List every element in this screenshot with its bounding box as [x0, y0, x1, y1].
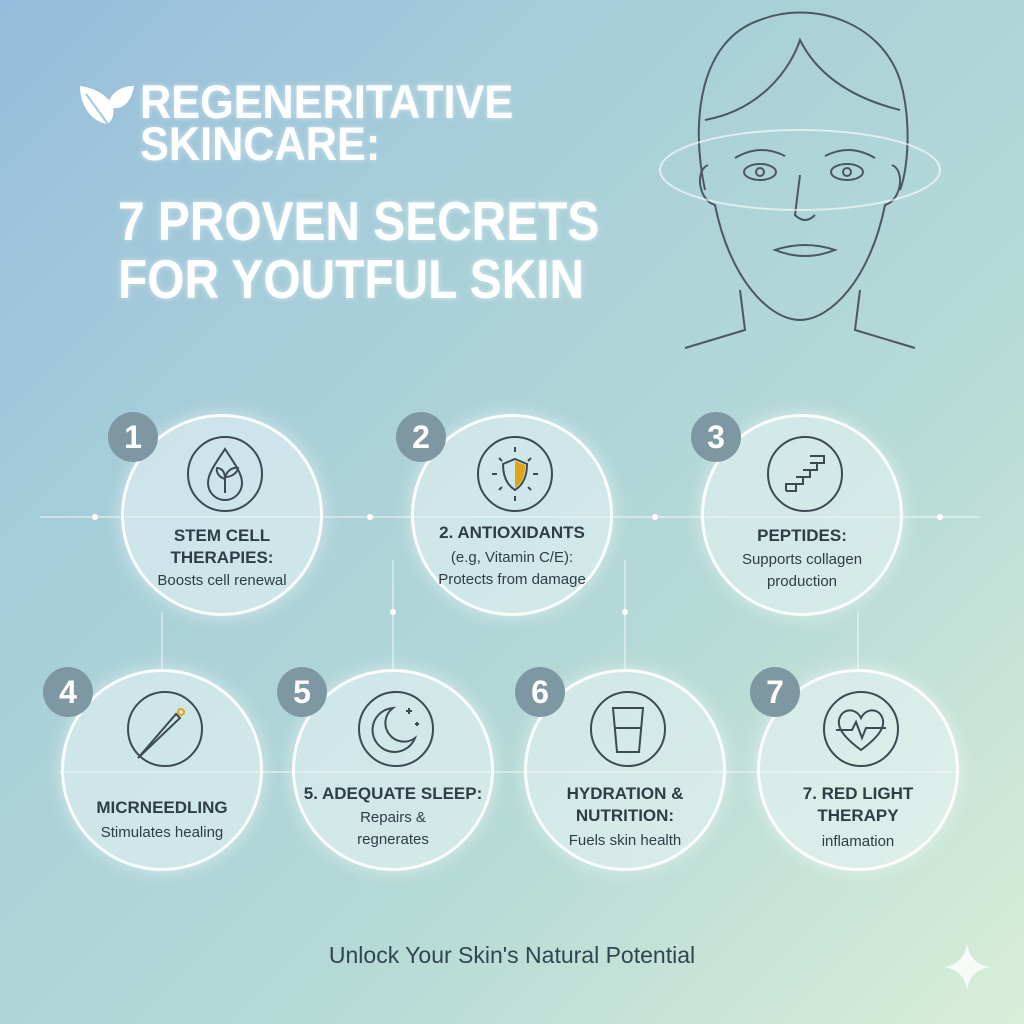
badge 1: 1: [124, 419, 142, 455]
badge 5: [277, 667, 327, 717]
panel 6: NUTRITION:: [576, 806, 674, 825]
icon: heart pulse: [823, 691, 899, 767]
icon: steps: [767, 436, 843, 512]
panel 7: THERAPY: [817, 806, 899, 825]
footer text: Unlock Your Skin's Natural Potential: [329, 942, 695, 968]
icon: drop sprout: [187, 436, 263, 512]
badge 1: [108, 412, 158, 462]
panel 7: [757, 669, 959, 871]
panel 7: 7. RED LIGHT: [803, 784, 913, 803]
panel 6: Fuels skin health: [569, 832, 681, 849]
panel 4: [61, 669, 263, 871]
panel 1: STEM CELL: [174, 526, 270, 545]
panel 7: inflamation: [822, 833, 894, 850]
icon: sun shield: [477, 436, 553, 512]
illustration: face: [659, 12, 941, 349]
title: 7 PROVEN SECRETS: [118, 190, 599, 252]
icon: sparkle: [944, 944, 990, 990]
icon: glass: [590, 691, 666, 767]
panel 2: [411, 414, 613, 616]
panel 1: THERAPIES:: [171, 548, 273, 567]
icon: moon: [358, 691, 434, 767]
panel 5: [292, 669, 494, 871]
title: SKINCARE:: [140, 117, 380, 170]
panel 4: MICRNEEDLING: [96, 798, 228, 817]
badge 7: 7: [766, 674, 784, 710]
icon: needle: [127, 691, 203, 767]
panel 3: PEPTIDES:: [757, 526, 847, 545]
panel 2: (e.g, Vitamin C/E):: [451, 549, 573, 566]
title: [80, 75, 600, 310]
badge 7: [750, 667, 800, 717]
title: REGENERITATIVE: [140, 75, 513, 128]
panel 3: [701, 414, 903, 616]
panel 2: Protects from damage: [438, 571, 586, 588]
panel 1: Boosts cell renewal: [157, 572, 287, 589]
panel 2: 2. ANTIOXIDANTS: [439, 523, 585, 542]
panel 6: [524, 669, 726, 871]
badge 4: 4: [59, 674, 77, 710]
badge 6: [515, 667, 565, 717]
panel 4: Stimulates healing: [101, 824, 223, 841]
badge 2: 2: [412, 419, 430, 455]
panel 6: HYDRATION &: [567, 784, 683, 803]
badge 3: [691, 412, 741, 462]
panel 3: Supports collagen: [742, 551, 862, 568]
badge 2: [396, 412, 446, 462]
panel 5: regnerates: [357, 831, 429, 848]
badge 5: 5: [293, 674, 311, 710]
panel 3: production: [767, 573, 837, 590]
panel 1: [121, 414, 323, 616]
badge 3: 3: [707, 419, 725, 455]
title: FOR YOUTFUL SKIN: [118, 248, 584, 310]
badge 4: [43, 667, 93, 717]
panel 5: Repairs &: [360, 809, 426, 826]
icon: leaves: [80, 86, 134, 124]
panel 5: 5. ADEQUATE SLEEP:: [304, 784, 482, 803]
badge 6: 6: [531, 674, 549, 710]
